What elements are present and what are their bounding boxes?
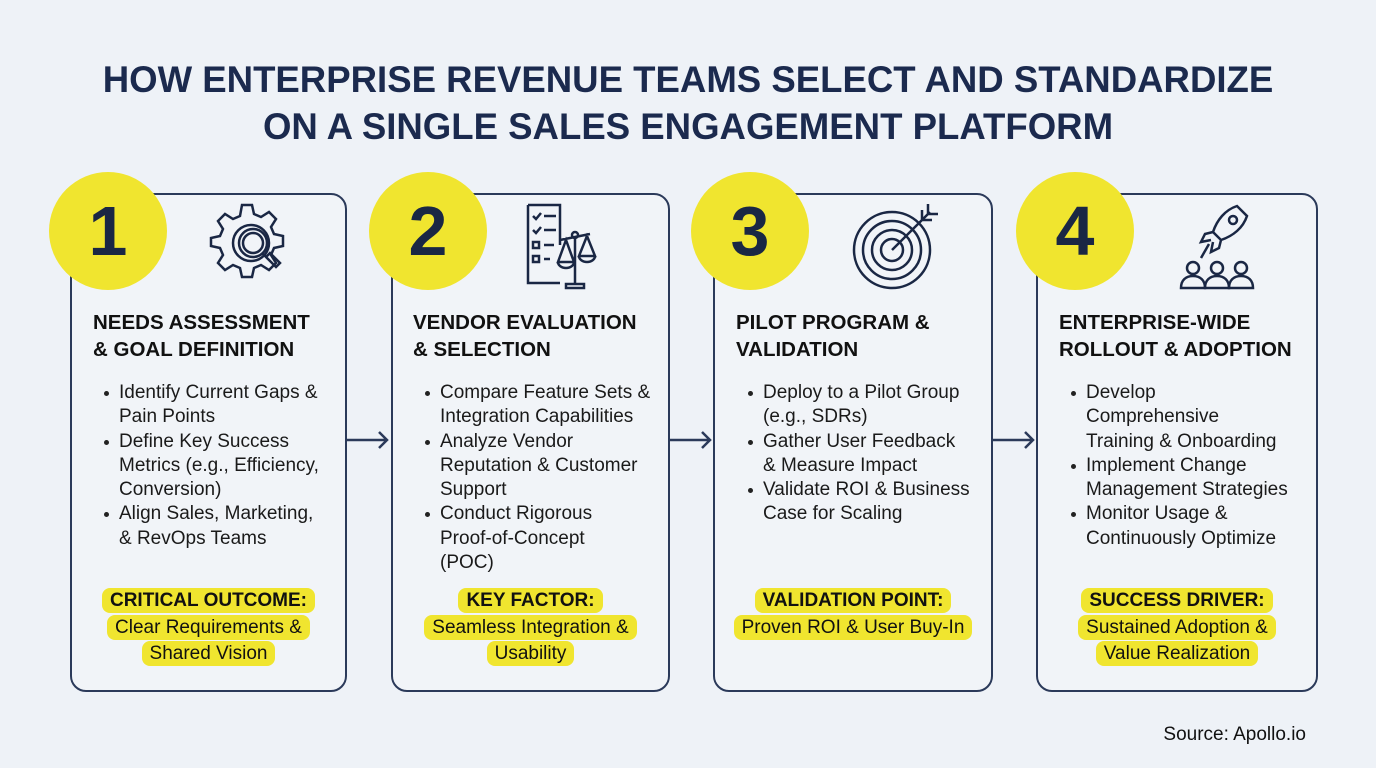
callout 1: Shared Vision xyxy=(150,643,267,664)
panel: step 4 xyxy=(1036,193,1318,692)
bullets 1: Align Sales, Marketing, xyxy=(119,503,313,524)
title: HOW ENTERPRISE REVENUE TEAMS SELECT AND STANDARDIZE xyxy=(103,59,1273,100)
bullets 3: & Measure Impact xyxy=(763,455,917,476)
heading 2: VENDOR EVALUATION xyxy=(413,311,637,334)
bullets 4: Continuously Optimize xyxy=(1086,528,1276,549)
bullets 4: Implement Change xyxy=(1086,455,1247,476)
icon: rocket and team xyxy=(1180,204,1254,290)
heading 3 xyxy=(736,311,930,361)
bullets 4: Monitor Usage & xyxy=(1086,503,1228,524)
bullets 2: (POC) xyxy=(440,552,494,573)
heading 1: NEEDS ASSESSMENT xyxy=(93,311,310,334)
heading 3: VALIDATION xyxy=(736,338,858,361)
icon: checklist with scales xyxy=(526,204,597,290)
callout 3: VALIDATION POINT: xyxy=(763,590,943,611)
callout 2: Seamless Integration & xyxy=(432,616,629,638)
heading 4 xyxy=(1059,311,1292,361)
bullets 4: Develop xyxy=(1086,382,1156,403)
bullets 1: Conversion) xyxy=(119,479,221,500)
icon: target with arrow xyxy=(852,204,938,290)
callout 2: KEY FACTOR: xyxy=(466,590,595,611)
bullets 1: Metrics (e.g., Efficiency, xyxy=(119,455,319,476)
number circle 3: 3 xyxy=(731,192,769,270)
bullets 2: Conduct Rigorous xyxy=(440,503,592,524)
bullets 2: Integration Capabilities xyxy=(440,406,633,427)
callout 2: Usability xyxy=(495,643,566,664)
bullets 2: Analyze Vendor xyxy=(440,431,573,452)
title: ON A SINGLE SALES ENGAGEMENT PLATFORM xyxy=(263,106,1113,147)
number circle 3 xyxy=(691,172,809,290)
panel: step 1 xyxy=(70,193,347,692)
callout 1 xyxy=(102,588,315,666)
panel: step 3 xyxy=(713,193,993,692)
callout 3: Proven ROI & User Buy-In xyxy=(742,616,964,638)
number circle 4 xyxy=(1016,172,1134,290)
number circle 4: 4 xyxy=(1056,192,1094,270)
heading 1 xyxy=(93,311,310,361)
panel: step 2 xyxy=(391,193,670,692)
bullets 2: Reputation & Customer xyxy=(440,455,638,476)
arrow 2 to 3 xyxy=(670,431,712,449)
arrow 1 to 2 xyxy=(347,431,389,449)
number circle 1: 1 xyxy=(89,192,127,270)
bullets 4: Management Strategies xyxy=(1086,479,1288,500)
bullets 4: Training & Onboarding xyxy=(1086,431,1276,452)
number circle 2 xyxy=(369,172,487,290)
bullets 3: Case for Scaling xyxy=(763,503,902,524)
bullets 1: Define Key Success xyxy=(119,431,289,452)
number circle 1 xyxy=(49,172,167,290)
bullets 3: Gather User Feedback xyxy=(763,431,955,452)
bullets 2 xyxy=(425,382,650,573)
callout 2 xyxy=(424,588,637,666)
bullets 4: Comprehensive xyxy=(1086,406,1219,427)
callout 4: SUCCESS DRIVER: xyxy=(1089,590,1265,611)
source: Source: Apollo.io xyxy=(1163,724,1306,745)
heading 2 xyxy=(413,311,637,361)
bullets 1: Identify Current Gaps & xyxy=(119,382,318,403)
bullets 2: Support xyxy=(440,479,507,500)
bullets 3: Deploy to a Pilot Group xyxy=(763,382,959,403)
callout 1: Clear Requirements & xyxy=(115,616,302,638)
bullets 1: & RevOps Teams xyxy=(119,528,266,549)
bullets 3: Validate ROI & Business xyxy=(763,479,970,500)
title xyxy=(103,59,1273,147)
callout 1: CRITICAL OUTCOME: xyxy=(110,590,307,611)
bullets 4 xyxy=(1071,382,1288,549)
arrow 3 to 4 xyxy=(993,431,1035,449)
bullets 3: (e.g., SDRs) xyxy=(763,406,868,427)
bullets 1 xyxy=(104,382,319,549)
callout 4: Value Realization xyxy=(1104,643,1250,664)
callout 3 xyxy=(734,588,972,640)
heading 2: & SELECTION xyxy=(413,338,551,361)
bullets 2: Compare Feature Sets & xyxy=(440,382,650,403)
heading 1: & GOAL DEFINITION xyxy=(93,338,294,361)
number circle 2: 2 xyxy=(409,192,447,270)
bullets 1: Pain Points xyxy=(119,406,215,427)
bullets 3 xyxy=(748,382,970,524)
bullets 2: Proof-of-Concept xyxy=(440,528,585,549)
heading 4: ROLLOUT & ADOPTION xyxy=(1059,338,1292,361)
heading 3: PILOT PROGRAM & xyxy=(736,311,930,334)
callout 4 xyxy=(1078,588,1276,666)
callout 4: Sustained Adoption & xyxy=(1086,616,1268,638)
heading 4: ENTERPRISE-WIDE xyxy=(1059,311,1250,334)
icon: gear with magnifier xyxy=(210,204,284,278)
